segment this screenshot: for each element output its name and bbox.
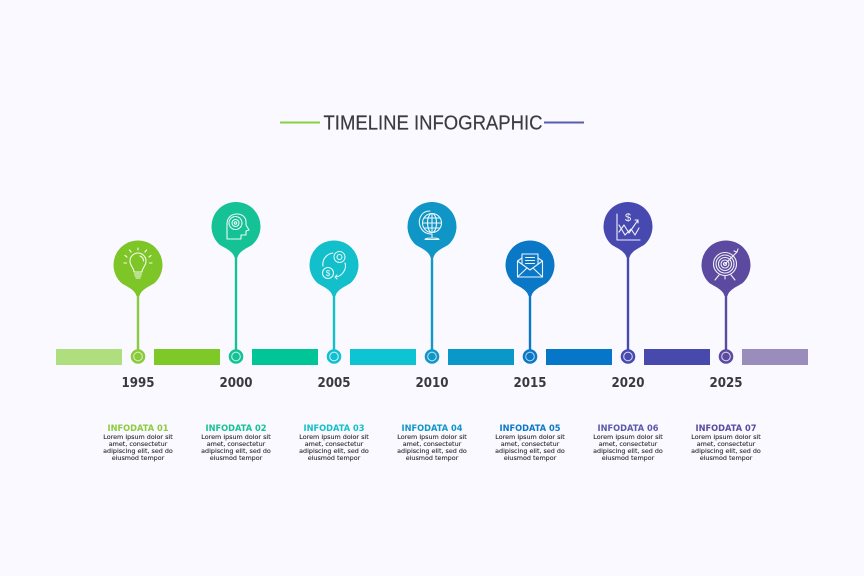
- info 02: amet, consectetur: [207, 440, 266, 448]
- info 01: eiusmod tempor: [112, 454, 165, 462]
- milestone 2005: [299, 240, 369, 462]
- year 2010: 2010: [416, 375, 448, 391]
- info 04: [397, 424, 467, 462]
- icon: globe: [419, 211, 442, 240]
- pin 2000: [212, 202, 260, 258]
- info 02: INFODATA 02: [206, 424, 266, 434]
- pin 1995: [114, 240, 163, 296]
- pin 2005: [310, 240, 358, 296]
- info 06: Lorem ipsum dolor sit: [593, 433, 663, 441]
- info 04: amet, consectetur: [403, 440, 462, 448]
- year 2025: 2025: [710, 375, 742, 391]
- info 07: amet, consectetur: [697, 440, 756, 448]
- info 05: amet, consectetur: [501, 440, 560, 448]
- info 05: [495, 424, 565, 462]
- icon: growth chart with dollar: [617, 212, 640, 240]
- year 2000: 2000: [220, 375, 252, 391]
- icon: light bulb: [124, 248, 152, 278]
- info 02: eiusmod tempor: [210, 454, 263, 462]
- info 06: INFODATA 06: [598, 424, 658, 434]
- info 01: adipiscing elit, sed do: [103, 447, 173, 455]
- info 03: eiusmod tempor: [308, 454, 361, 462]
- icon: open envelope: [518, 254, 542, 277]
- info 03: [299, 424, 369, 462]
- milestone 2000: [201, 202, 271, 462]
- info 01: [103, 424, 173, 462]
- info 05: eiusmod tempor: [504, 454, 557, 462]
- icon: target with arrow: [714, 249, 738, 280]
- info 05: adipiscing elit, sed do: [495, 447, 565, 455]
- pin 2025: [702, 240, 750, 296]
- info 04: Lorem ipsum dolor sit: [397, 433, 467, 441]
- info 07: INFODATA 07: [696, 424, 756, 434]
- info 02: Lorem ipsum dolor sit: [201, 433, 271, 441]
- info 06: eiusmod tempor: [602, 454, 655, 462]
- info 03: INFODATA 03: [304, 424, 364, 434]
- info 04: adipiscing elit, sed do: [397, 447, 467, 455]
- milestone 2015: [495, 240, 565, 462]
- icon: growth chart with dollar: $: [625, 212, 631, 224]
- year 2015: 2015: [514, 375, 546, 391]
- title: TIMELINE INFOGRAPHIC: [324, 112, 542, 134]
- info 02: [201, 424, 271, 462]
- milestone 2020: [593, 202, 663, 462]
- milestone 1995: [103, 240, 173, 462]
- info 03: amet, consectetur: [305, 440, 364, 448]
- info 05: Lorem ipsum dolor sit: [495, 433, 565, 441]
- info 04: eiusmod tempor: [406, 454, 459, 462]
- info 03: Lorem ipsum dolor sit: [299, 433, 369, 441]
- info 02: adipiscing elit, sed do: [201, 447, 271, 455]
- year 2005: 2005: [318, 375, 350, 391]
- milestone 2010: [397, 202, 467, 462]
- year 2020: 2020: [612, 375, 644, 391]
- icon: gear and dollar cycle: $: [326, 269, 331, 278]
- icon: head with gear: [227, 214, 249, 239]
- info 01: INFODATA 01: [108, 424, 168, 434]
- info 07: Lorem ipsum dolor sit: [691, 433, 761, 441]
- milestone 2025: [691, 240, 761, 462]
- info 06: adipiscing elit, sed do: [593, 447, 663, 455]
- info 01: amet, consectetur: [109, 440, 168, 448]
- info 07: [691, 424, 761, 462]
- info 07: adipiscing elit, sed do: [691, 447, 761, 455]
- info 06: [593, 424, 663, 462]
- info 06: amet, consectetur: [599, 440, 658, 448]
- year 1995: 1995: [122, 375, 154, 391]
- pin 2020: [604, 202, 652, 258]
- pin 2010: [408, 202, 456, 258]
- icon: gear and dollar cycle: [322, 252, 345, 279]
- info 01: Lorem ipsum dolor sit: [103, 433, 173, 441]
- info 03: adipiscing elit, sed do: [299, 447, 369, 455]
- timeline bar segments: [56, 349, 808, 365]
- info 05: INFODATA 05: [500, 424, 560, 434]
- pin 2015: [506, 240, 554, 296]
- info 07: eiusmod tempor: [700, 454, 753, 462]
- info 04: INFODATA 04: [402, 424, 462, 434]
